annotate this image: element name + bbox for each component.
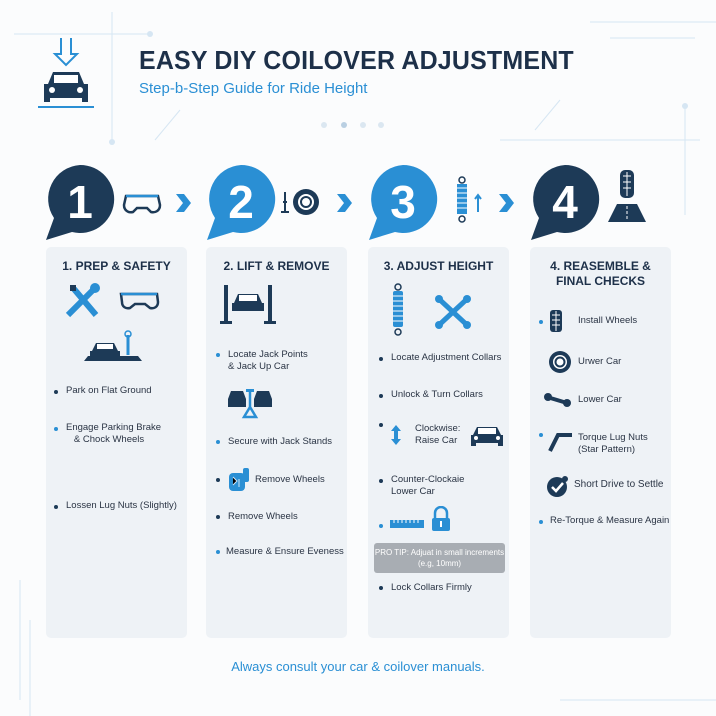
icon: torque wrench bbox=[548, 433, 572, 452]
icon: wrench bbox=[544, 393, 571, 407]
badge 4 bbox=[531, 165, 599, 240]
panel: 3 adjust height bbox=[368, 247, 509, 638]
icon: up/down arrow bbox=[391, 425, 401, 445]
panel: 3 adjust height: Lower Car bbox=[391, 486, 435, 497]
panel: 4 reassemble: Install Wheels bbox=[578, 315, 637, 326]
panel: 3 adjust height: Lock Collars Firmly bbox=[391, 582, 472, 593]
panel: 4 reassemble: FINAL CHECKS bbox=[556, 274, 645, 288]
badge 2 bbox=[207, 165, 275, 240]
panel: 4 reassemble: Urwer Car bbox=[578, 356, 621, 367]
icon: tire on road bbox=[608, 170, 646, 222]
panel: 1 prep & safety: Engage Parking Brake bbox=[66, 422, 161, 433]
icon: car with down arrow bbox=[38, 38, 94, 108]
footer note: Always consult your car & coilover manuals. bbox=[231, 659, 485, 674]
panel: 4 reassemble: Torque Lug Nuts bbox=[578, 432, 648, 443]
panel: 1 prep & safety: Lossen Lug Nuts (Slightly) bbox=[66, 500, 177, 511]
panel: 1 prep & safety: & Chock Wheels bbox=[74, 434, 144, 445]
badge 1: 1 bbox=[67, 176, 93, 228]
panel: 4 reassemble: 4. REASEMBLE & bbox=[550, 259, 651, 273]
icon: wheel bbox=[549, 351, 571, 373]
panel: 4 reassemble: Short Drive to Settle bbox=[574, 479, 663, 490]
icon: goggles bbox=[124, 196, 160, 212]
dots bbox=[321, 122, 384, 128]
panel: 2 lift & remove: Remove Wheels bbox=[255, 474, 325, 485]
step badges row bbox=[46, 165, 646, 240]
badge 2: 2 bbox=[228, 176, 254, 228]
panel: 2 lift & remove: Remove Wheels bbox=[228, 511, 298, 522]
panel: 4 reassemble: Re-Torque & Measure Again bbox=[550, 515, 669, 526]
panel: 3 adjust height: Clockwise: bbox=[415, 423, 460, 434]
icon: coilover bbox=[393, 283, 403, 336]
icon: tools bbox=[66, 283, 100, 318]
subtitle: Step-b-Step Guide for Ride Height bbox=[139, 80, 367, 97]
callout: pro tip: (e.g, 10mm) bbox=[418, 559, 461, 568]
panel: 1 prep & safety: 1. PREP & SAFETY bbox=[62, 259, 171, 273]
panel: 3 adjust height: Counter-Clockaie bbox=[391, 474, 464, 485]
panel: 2 lift & remove: & Jack Up Car bbox=[228, 361, 289, 372]
arrow bbox=[176, 194, 191, 212]
icon: car bbox=[471, 427, 503, 446]
callout: pro tip bbox=[374, 543, 505, 573]
icon: jack stands bbox=[228, 389, 272, 418]
panel: 2 lift & remove: Secure with Jack Stands bbox=[228, 436, 332, 447]
arrow bbox=[337, 194, 352, 212]
badge 3 bbox=[369, 165, 437, 240]
icon: ruler and lock bbox=[390, 506, 450, 531]
title: EASY DIY COILOVER ADJUSTMENT bbox=[139, 45, 574, 75]
panel: 3 adjust height: Locate Adjustment Collars bbox=[391, 352, 501, 363]
icon: wrenches bbox=[435, 295, 471, 329]
icon: check gauge bbox=[547, 476, 568, 497]
panel: 1 prep & safety bbox=[46, 247, 187, 638]
panel: 3 adjust height: Unlock & Turn Collars bbox=[391, 389, 483, 400]
panel: 2 lift & remove: Measure & Ensure Eveness bbox=[226, 546, 344, 557]
icon: goggles bbox=[120, 292, 160, 310]
icon: jack and wheel bbox=[281, 189, 319, 215]
icon: wheel removal bbox=[229, 468, 249, 491]
panel: 2 lift & remove: Locate Jack Points bbox=[228, 349, 308, 360]
panel: 2 lift & remove bbox=[206, 247, 347, 638]
panel: 1 prep & safety: Park on Flat Ground bbox=[66, 385, 152, 396]
icon: car lift bbox=[220, 285, 276, 324]
arrow bbox=[499, 194, 514, 212]
panel: 4 reassemble: Lower Car bbox=[578, 394, 622, 405]
badge 4: 4 bbox=[552, 176, 578, 228]
icon: coilover up bbox=[457, 177, 481, 222]
panel: 3 adjust height: 3. ADJUST HEIGHT bbox=[384, 259, 493, 273]
icon: car on flat ground bbox=[84, 330, 142, 361]
callout: pro tip: PRO TIP: Adjuat in small increments bbox=[375, 548, 504, 557]
panel: 3 adjust height: Raise Car bbox=[415, 435, 457, 446]
panel: 4 reassemble bbox=[530, 247, 671, 638]
badge 3: 3 bbox=[390, 176, 416, 228]
icon: tire bbox=[550, 310, 562, 332]
panel: 2 lift & remove: 2. LIFT & REMOVE bbox=[223, 259, 330, 273]
panel: 4 reassemble: (Star Pattern) bbox=[578, 444, 635, 455]
badge 1 bbox=[46, 165, 114, 240]
